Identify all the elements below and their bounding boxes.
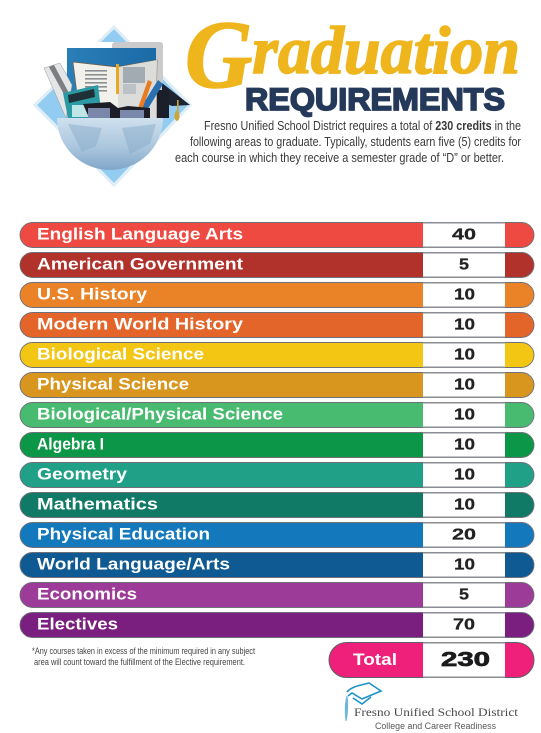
footnote: *Any courses taken in excess of the minimum required in any subject [32, 646, 255, 656]
total row [329, 642, 534, 678]
row: Physical Science: Physical Science [37, 376, 189, 394]
row: U.S. History [20, 282, 534, 308]
row: U.S. History: U.S. History [37, 286, 148, 304]
logo: Fresno Unified School District [345, 683, 519, 731]
row: World Language/Arts [20, 552, 534, 578]
row: Economics: 5 [459, 586, 469, 604]
footnote: area will count toward the fulfillment of the Elective requirement. [34, 657, 245, 667]
row: Biological Science: 10 [454, 346, 475, 364]
row: Algebra I: Algebra I [37, 436, 104, 454]
row: English Language Arts: 40 [452, 226, 476, 244]
intro text block: Fresno Unified School District requires a total of 230 credits in the [204, 119, 521, 133]
row: Geometry [20, 462, 534, 488]
row: Economics: Economics [37, 586, 137, 604]
row: Mathematics [20, 492, 534, 518]
intro text block: each course in which they receive a semester grade of “D” or better. [175, 151, 504, 165]
row: World Language/Arts: World Language/Arts [37, 556, 230, 574]
row: English Language Arts: English Language Arts [37, 226, 243, 244]
row: Biological Science [20, 342, 534, 368]
row: Electives: 70 [453, 616, 475, 634]
row: American Government: American Government [37, 256, 244, 274]
row: Modern World History [20, 312, 534, 338]
total row: Total [353, 650, 397, 669]
row: American Government [20, 252, 534, 278]
row: Mathematics: Mathematics [37, 496, 158, 514]
footnote [32, 646, 255, 667]
row: Electives [20, 612, 534, 638]
total row: 230 [441, 649, 490, 671]
row: Mathematics: 10 [454, 496, 475, 514]
row: Economics [20, 582, 534, 608]
row: Physical Science [20, 372, 534, 398]
icon: education globe bowl illustration [35, 27, 190, 185]
row: Physical Education: 20 [452, 526, 476, 544]
logo: Fresno Unified School District: Fresno Unified School District [354, 705, 519, 719]
row: Physical Education: Physical Education [37, 526, 210, 544]
intro text block [175, 119, 521, 165]
row: Algebra I: 10 [454, 436, 475, 454]
row: Modern World History: 10 [454, 316, 475, 334]
logo: Fresno Unified School District: College and Career Readiness [375, 721, 496, 731]
row: American Government: 5 [459, 256, 469, 274]
row: Biological/Physical Science: Biological/Physical Science [37, 406, 283, 424]
title: Graduation [185, 1, 520, 108]
row: Biological/Physical Science [20, 402, 534, 428]
row: Geometry: Geometry [37, 466, 128, 484]
row: Geometry: 10 [454, 466, 475, 484]
heading: Requirements: REQUIREMENTS [245, 81, 505, 117]
row: U.S. History: 10 [454, 286, 475, 304]
row: Physical Education [20, 522, 534, 548]
row: Physical Science: 10 [454, 376, 475, 394]
row: World Language/Arts: 10 [454, 556, 475, 574]
row: Algebra I [20, 432, 534, 458]
title: Graduation: G [185, 1, 252, 108]
row: Biological Science: Biological Science [37, 346, 204, 364]
row: Modern World History: Modern World History [37, 316, 244, 334]
row: Electives: Electives [37, 616, 118, 634]
title: Graduation: raduation [252, 12, 520, 88]
row: Biological/Physical Science: 10 [454, 406, 475, 424]
row: English Language Arts [20, 222, 534, 248]
